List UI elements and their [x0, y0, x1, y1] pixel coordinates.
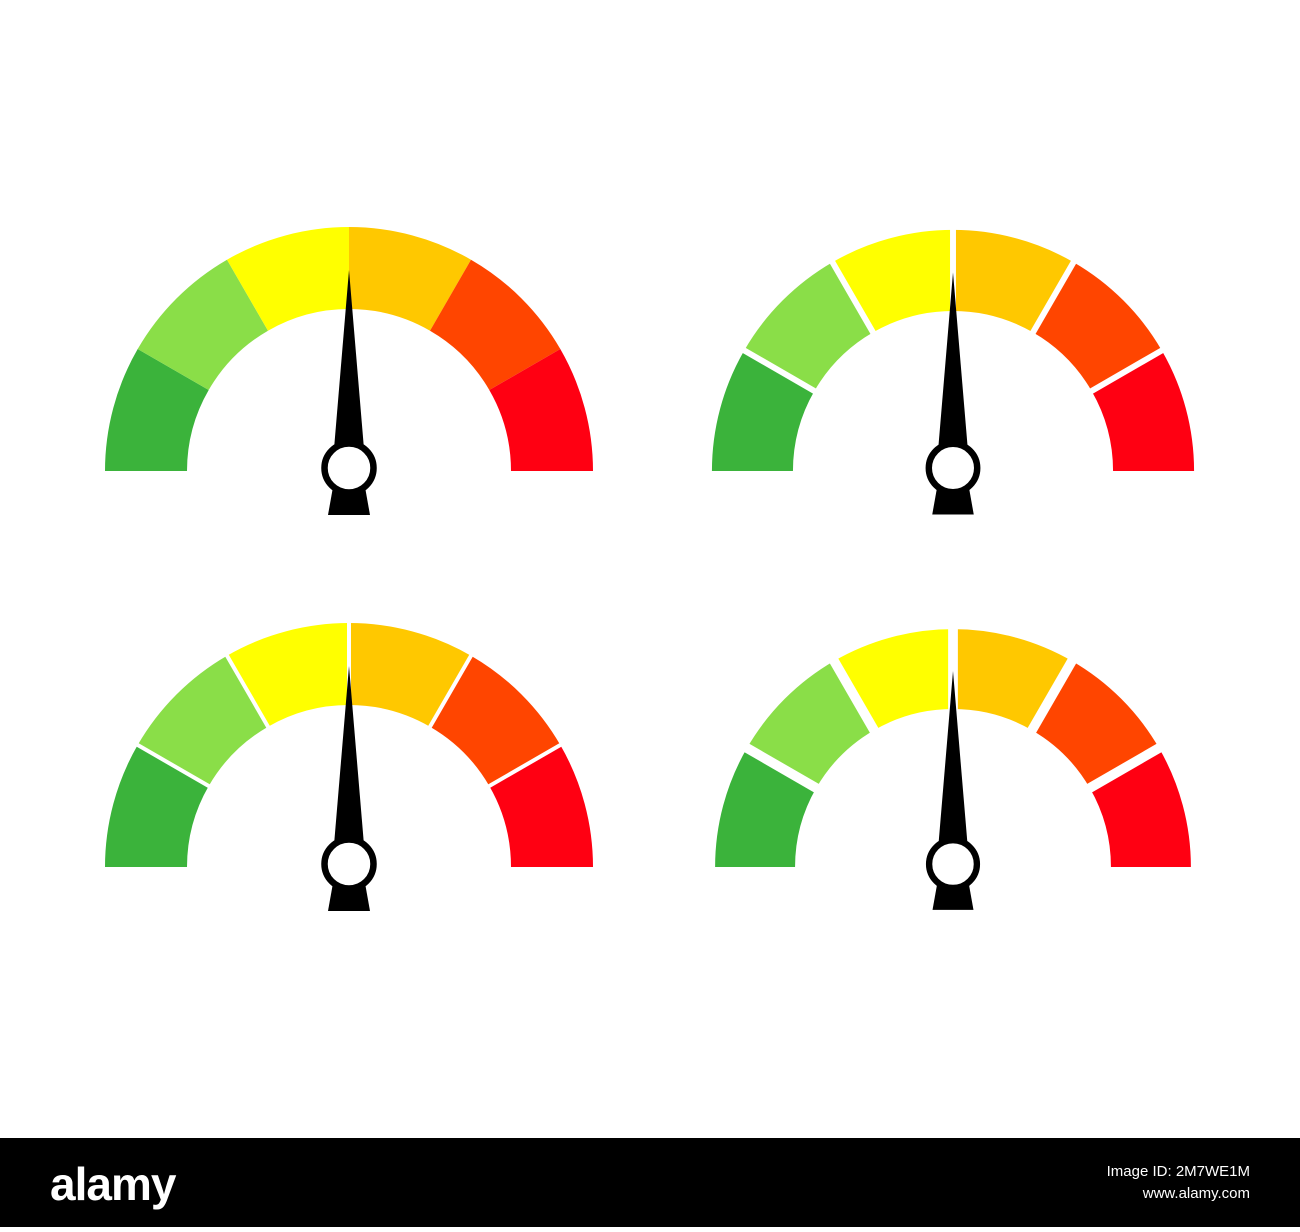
image id text: Image ID: 2M7WE1M	[1107, 1163, 1250, 1180]
gauge 1: top left	[146, 268, 552, 515]
gauge 3: bottom left	[124, 607, 574, 911]
url text: www.alamy.com	[1142, 1185, 1250, 1202]
gauge 2: top right	[731, 214, 1175, 514]
footer bar	[0, 1138, 1300, 1227]
gauge 4: bottom right	[733, 614, 1173, 910]
logo text: alamy	[50, 1158, 177, 1210]
